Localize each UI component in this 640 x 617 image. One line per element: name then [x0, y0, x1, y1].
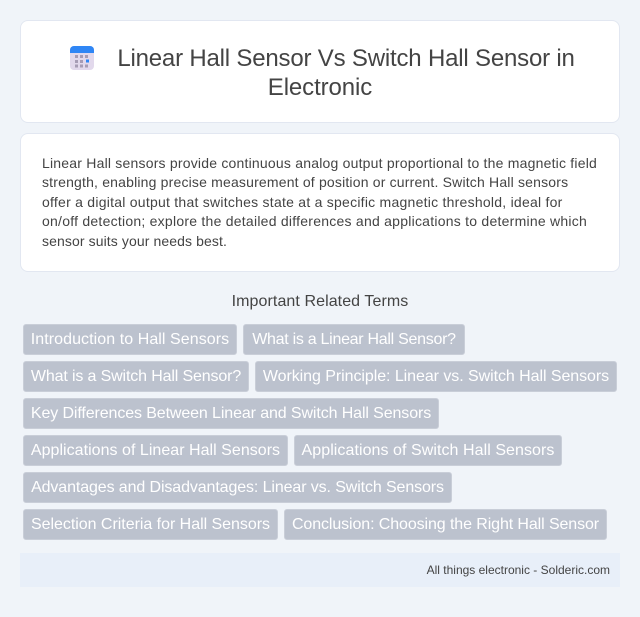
- tag: working principle: [255, 361, 617, 392]
- tag: linear sensor: What is a Linear Hall Sensor?: [252, 331, 456, 348]
- footer: [20, 553, 620, 587]
- title: Linear Hall Sensor Vs Switch Hall Sensor in: [117, 45, 575, 72]
- tag: advantages: Advantages and Disadvantages: Linear vs. Switch Sensors: [31, 479, 444, 496]
- heading: important related terms: Important Related Terms: [232, 293, 408, 310]
- tag: linear sensor: [243, 324, 465, 355]
- tag: conclusion: Conclusion: Choosing the Right Hall Sensor: [292, 516, 599, 533]
- description text: offer a digital output that switches state at a specific magnetic threshold, ideal for: [42, 194, 563, 210]
- description text: strength, enabling precise measurement of position or current. Switch Hall sensors: [42, 174, 568, 190]
- tag: introduction: Introduction to Hall Sensors: [31, 331, 229, 348]
- tag: switch applications: [294, 435, 562, 466]
- tag: selection criteria: [23, 509, 278, 540]
- footer: All things electronic - Solderic.com: [427, 563, 610, 577]
- tag: working principle: Working Principle: Linear vs. Switch Hall Sensors: [263, 368, 609, 385]
- tag: selection criteria: Selection Criteria for Hall Sensors: [31, 516, 270, 533]
- title: Electronic: [268, 74, 372, 101]
- tag: conclusion: [284, 509, 607, 540]
- description text: on/off detection; explore the detailed differences and applications to determine which: [42, 213, 587, 229]
- tag: switch sensor: [23, 361, 249, 392]
- icon: calendar grid: [70, 46, 94, 70]
- tag: linear applications: Applications of Linear Hall Sensors: [31, 442, 280, 459]
- tag: key differences: Key Differences Between Linear and Switch Hall Sensors: [31, 405, 431, 422]
- tag: switch applications: Applications of Switch Hall Sensors: [302, 442, 554, 459]
- tag: switch sensor: What is a Switch Hall Sensor?: [31, 368, 241, 385]
- description panel: [20, 133, 620, 272]
- header panel: [20, 20, 620, 123]
- tag: linear applications: [23, 435, 288, 466]
- tag: introduction: [23, 324, 237, 355]
- description text: [42, 155, 597, 249]
- title: [117, 45, 575, 101]
- tag: advantages: [23, 472, 452, 503]
- tag: key differences: [23, 398, 439, 429]
- description text: sensor suits your needs best.: [42, 233, 227, 249]
- description text: Linear Hall sensors provide continuous analog output proportional to the magnetic field: [42, 155, 597, 171]
